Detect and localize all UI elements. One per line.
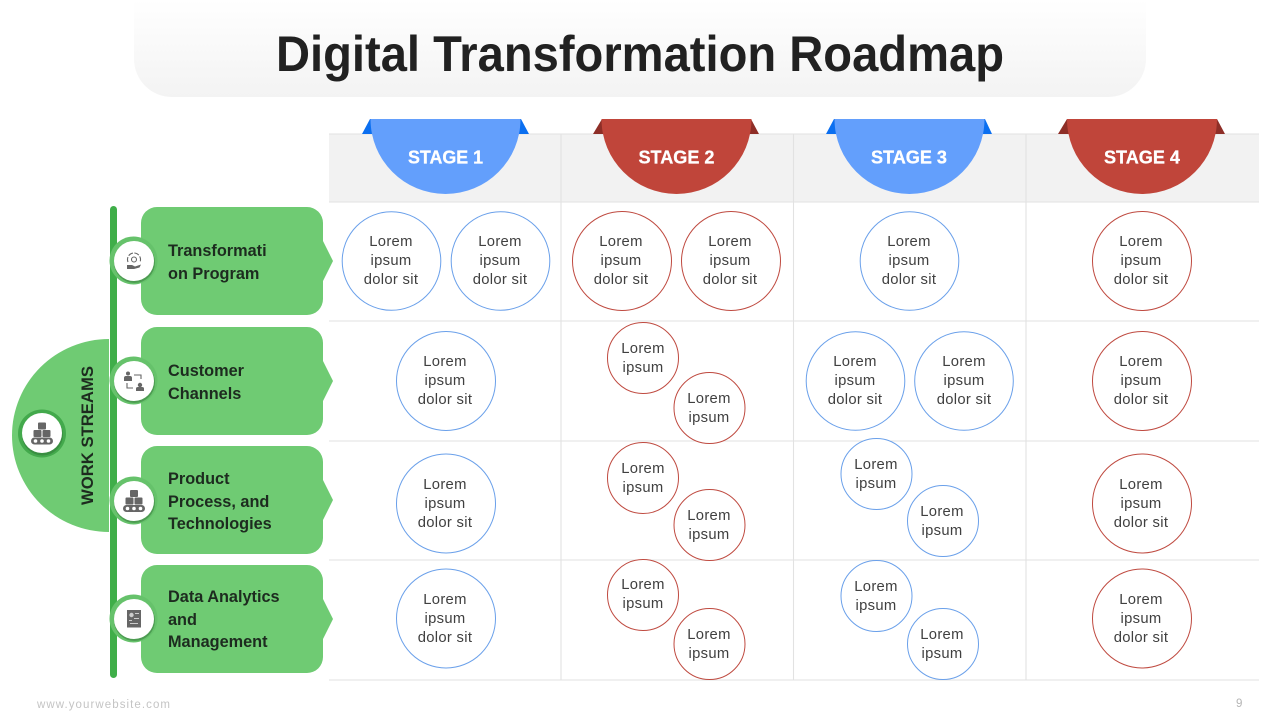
row 3 stage 4 bubble: Lorem: [1119, 477, 1163, 493]
stage 1 header: [362, 119, 529, 194]
row 1 stage 3 bubble: dolor sit: [882, 272, 936, 288]
row 4 stage 3 bubbles: ipsum: [922, 646, 962, 662]
row 2 stage 3 bubbles: [806, 332, 1013, 430]
stage 1 header: STAGE 1: [408, 146, 483, 168]
work streams node icon: [18, 410, 66, 458]
row 3 stage 3 bubbles: ipsum: [922, 523, 962, 539]
row 2 label card: Customer: [168, 362, 245, 380]
row 3 stage 3 bubbles: [841, 438, 978, 556]
page number: 9: [1236, 698, 1242, 710]
row 2 stage 2 bubbles: Lorem: [621, 341, 665, 357]
row 1 stage 3 bubble: Lorem: [887, 234, 931, 250]
row 1 stage 1 bubbles: Lorem: [478, 234, 522, 250]
row 1 stage 1 bubbles: dolor sit: [364, 272, 418, 288]
stage 2 header: STAGE 2: [638, 146, 714, 168]
row 1 stage 4 bubble: [1092, 212, 1192, 310]
row 4 stage 1 bubble: Lorem: [423, 592, 467, 608]
row 1 stage 1 bubbles: ipsum: [371, 253, 411, 269]
row 4 label card: [141, 565, 333, 673]
row 1 stage 4 bubble: ipsum: [1121, 253, 1161, 269]
row 2 stage 3 bubbles: dolor sit: [937, 392, 991, 408]
row 4 stage 2 bubbles: [608, 560, 745, 680]
row 2 stage 4 bubble: Lorem: [1119, 354, 1163, 370]
row 3 label card: [141, 446, 333, 554]
row 2 stage 2 bubbles: ipsum: [689, 410, 729, 426]
row 4 stage 3 bubbles: Lorem: [854, 579, 898, 595]
row 3 stage 4 bubble: dolor sit: [1114, 515, 1168, 531]
row 2 stage 1 bubble: ipsum: [425, 373, 465, 389]
row 1 stage 2 bubbles: Lorem: [708, 234, 752, 250]
row 1 stage 1 bubbles: Lorem: [369, 234, 413, 250]
table grid: [329, 134, 1259, 680]
row 3 stage 2 bubbles: Lorem: [621, 461, 665, 477]
row 4 stage 2 bubbles: Lorem: [621, 577, 665, 593]
row 1 stage 2 bubbles: ipsum: [710, 253, 750, 269]
row 2 stage 3 bubbles: ipsum: [835, 373, 875, 389]
row 2 stage 1 bubble: Lorem: [423, 354, 467, 370]
footer website: www.yourwebsite.com: [36, 699, 170, 711]
row 1 stage 1 bubbles: [342, 212, 550, 310]
work streams label: WORK STREAMS: [78, 366, 97, 505]
stage 4 header: [1058, 119, 1225, 194]
row 2 stage 1 bubble: dolor sit: [418, 392, 472, 408]
row 3 stage 1 bubble: ipsum: [425, 496, 465, 512]
row 2 stage 4 bubble: [1092, 332, 1192, 430]
title band: [134, 0, 1146, 97]
row 3 stage 3 bubbles: ipsum: [856, 476, 896, 492]
row 3 stage 2 bubbles: ipsum: [689, 527, 729, 543]
row 1 stage 2 bubbles: ipsum: [601, 253, 641, 269]
row 4 stage 4 bubble: ipsum: [1121, 611, 1161, 627]
stage 3 header: [826, 119, 992, 194]
row 1 stage 4 bubble: Lorem: [1119, 234, 1163, 250]
row 1 label card: Transformati: [168, 242, 267, 260]
row 2 stage 3 bubbles: Lorem: [942, 354, 986, 370]
row 3 stage 1 bubble: Lorem: [423, 477, 467, 493]
row 4 label card: and: [168, 611, 197, 629]
row 3 label card: Process, and: [168, 493, 269, 511]
row 3 label card: Product: [168, 470, 230, 488]
row 3 stage 3 bubbles: Lorem: [854, 457, 898, 473]
row 2 stage 4 bubble: ipsum: [1121, 373, 1161, 389]
row 3 stage 2 bubbles: Lorem: [687, 508, 731, 524]
row 4 stage 4 bubble: [1092, 569, 1192, 668]
row 4 stage 2 bubbles: Lorem: [687, 627, 731, 643]
row 4 label card: Data Analytics: [168, 588, 280, 606]
row 1 stage 2 bubbles: dolor sit: [703, 272, 757, 288]
row 4 stage 1 bubble: dolor sit: [418, 630, 472, 646]
row 2 stage 2 bubbles: [608, 322, 745, 444]
row 2 label card: Channels: [168, 385, 241, 403]
row 3 stage 4 bubble: ipsum: [1121, 496, 1161, 512]
stage 3 header: STAGE 3: [871, 146, 947, 168]
vertical green bar: [110, 206, 117, 678]
row 4 stage 1 bubble: ipsum: [425, 611, 465, 627]
row 3 label card: Technologies: [168, 515, 272, 533]
row 3 stage 2 bubbles: [608, 442, 745, 560]
row 1 stage 3 bubble: [860, 212, 959, 310]
row 3 stage 3 bubbles: Lorem: [920, 504, 964, 520]
row 1 label card: on Program: [168, 265, 259, 283]
row 3 stage 2 bubbles: ipsum: [623, 480, 663, 496]
row 1 icon: gear in hand: [110, 236, 158, 284]
row 3 stage 4 bubble: [1092, 454, 1192, 553]
row 4 stage 4 bubble: Lorem: [1119, 592, 1163, 608]
row 2 stage 1 bubble: [396, 332, 496, 430]
row 2 label card: [141, 327, 333, 435]
row 1 stage 1 bubbles: ipsum: [480, 253, 520, 269]
stage 4 header: STAGE 4: [1104, 146, 1181, 168]
work streams half circle: [12, 339, 109, 532]
row 4 stage 4 bubble: dolor sit: [1114, 630, 1168, 646]
row 2 icon: people exchange: [110, 356, 158, 404]
row 4 stage 2 bubbles: ipsum: [623, 596, 663, 612]
row 1 stage 1 bubbles: dolor sit: [473, 272, 527, 288]
row 1 stage 2 bubbles: [572, 212, 780, 310]
title: Digital Transformation Roadmap: [276, 26, 1004, 82]
row 4 stage 3 bubbles: [841, 560, 978, 680]
row 4 stage 3 bubbles: ipsum: [856, 598, 896, 614]
row 4 stage 2 bubbles: ipsum: [689, 646, 729, 662]
row 4 stage 1 bubble: [396, 569, 496, 668]
row 1 label card: [141, 207, 333, 315]
row 3 stage 1 bubble: [396, 454, 496, 553]
row 2 stage 3 bubbles: ipsum: [944, 373, 984, 389]
row 3 stage 1 bubble: dolor sit: [418, 515, 472, 531]
row 2 stage 2 bubbles: Lorem: [687, 391, 731, 407]
row 1 stage 4 bubble: dolor sit: [1114, 272, 1168, 288]
row 1 stage 3 bubble: ipsum: [889, 253, 929, 269]
row 4 icon: analytics document: [110, 594, 158, 642]
stage 2 header: [593, 119, 759, 194]
row 4 stage 3 bubbles: Lorem: [920, 627, 964, 643]
row 4 label card: Management: [168, 633, 268, 651]
row 1 stage 2 bubbles: Lorem: [599, 234, 643, 250]
row 2 stage 3 bubbles: Lorem: [833, 354, 877, 370]
row 2 stage 2 bubbles: ipsum: [623, 360, 663, 376]
row 2 stage 4 bubble: dolor sit: [1114, 392, 1168, 408]
row 1 stage 2 bubbles: dolor sit: [594, 272, 648, 288]
row 2 stage 3 bubbles: dolor sit: [828, 392, 882, 408]
row 3 icon: boxes on conveyor: [110, 476, 158, 524]
